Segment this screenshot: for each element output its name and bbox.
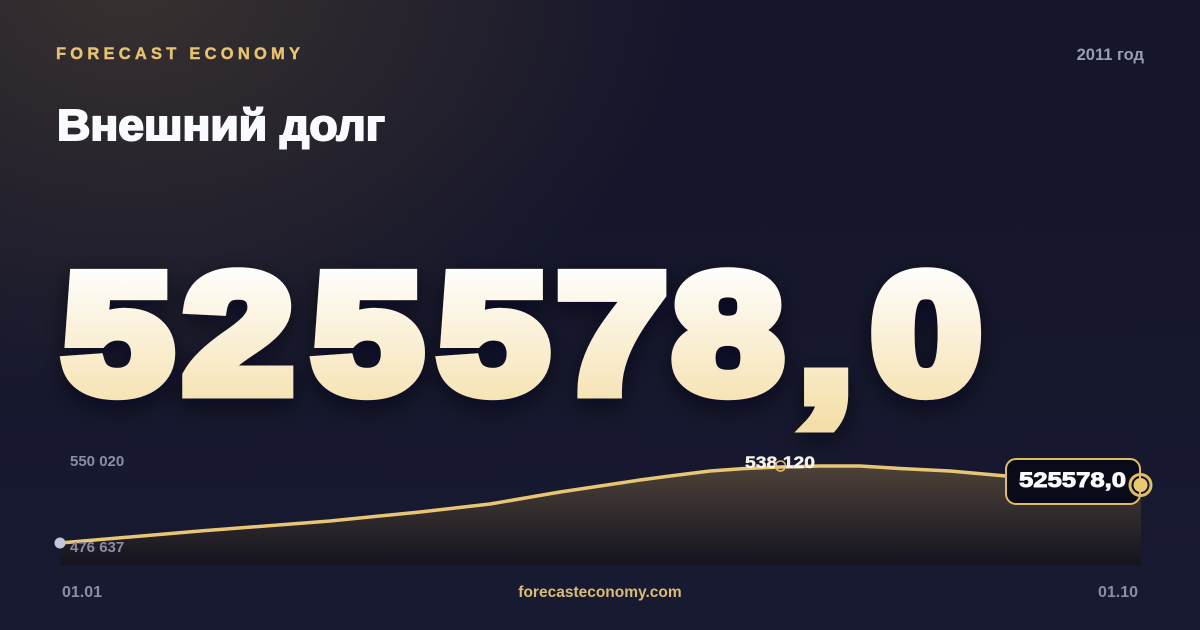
- current value callout: 525578,0: [1019, 469, 1126, 492]
- chart line: [60, 466, 1006, 543]
- current value callout: [1006, 459, 1140, 504]
- peak marker: [776, 461, 786, 471]
- peak value label: 538 120: [745, 453, 815, 472]
- start date: 01.01: [62, 584, 102, 601]
- end date: 01.10: [1098, 584, 1138, 601]
- brand label: FORECAST ECONOMY: [56, 45, 300, 63]
- main value: 525578,0: [63, 239, 981, 435]
- source url: forecasteconomy.com: [518, 584, 682, 601]
- max axis label: 550 020: [70, 453, 124, 470]
- chart: debt line: [54, 453, 1151, 565]
- end point marker: [1130, 474, 1151, 496]
- chart area fill: [60, 466, 1141, 565]
- start point: [54, 538, 66, 548]
- year label: 2011 год: [1077, 46, 1145, 64]
- min axis label: 476 637: [70, 539, 124, 556]
- title: Внешний долг: [57, 101, 385, 150]
